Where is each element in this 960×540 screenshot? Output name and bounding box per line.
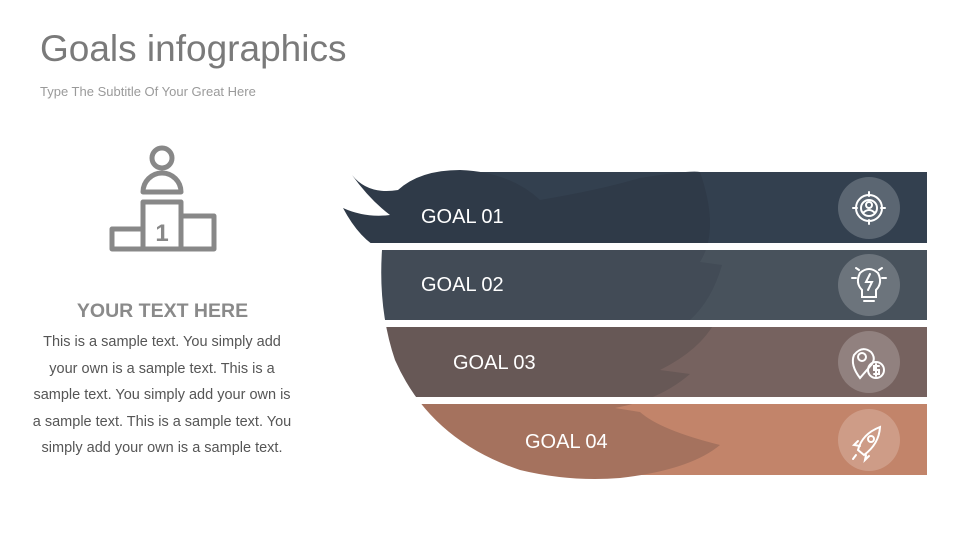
icon circles	[838, 177, 900, 471]
subtitle: Type The Subtitle Of Your Great Here	[40, 84, 256, 99]
labels: GOAL 01	[421, 206, 504, 228]
body text: sample text. You simply add your own is	[33, 387, 291, 403]
labels	[421, 206, 608, 453]
icon: podium	[110, 146, 216, 252]
icons	[852, 192, 886, 460]
heading: your text here: YOUR TEXT HERE	[77, 300, 248, 322]
title: Goals infographics	[40, 28, 346, 69]
body text	[33, 334, 291, 456]
labels: GOAL 04	[525, 431, 608, 453]
icon: podium: 1	[155, 220, 169, 247]
labels: GOAL 02	[421, 274, 504, 296]
body text: simply add your own is a sample text.	[42, 440, 282, 456]
body text: This is a sample text. You simply add	[43, 334, 281, 350]
chart: bird goal bars	[343, 170, 927, 479]
bars	[470, 172, 927, 243]
labels: GOAL 03	[453, 352, 536, 374]
body text: a sample text. This is a sample text. You	[33, 414, 291, 430]
bird silhouette	[343, 170, 720, 479]
body text: your own is a sample text. This is a	[49, 360, 275, 376]
